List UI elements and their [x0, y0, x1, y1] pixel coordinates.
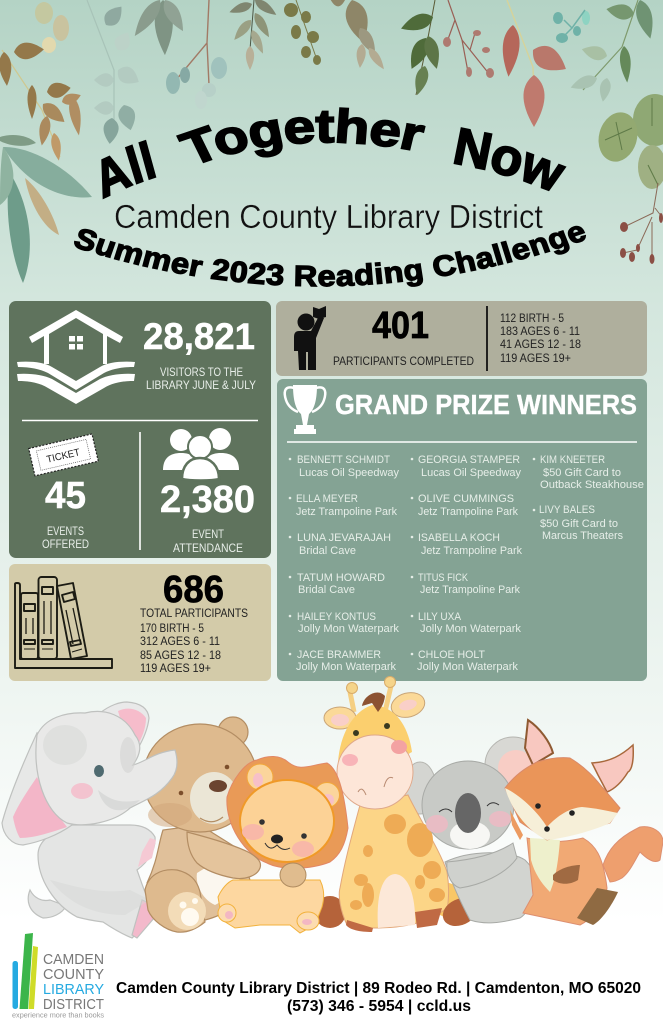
- title: All: [101, 140, 156, 200]
- animal: koala: [422, 737, 541, 923]
- winners column 2: Jolly Mon Waterpark: [420, 623, 521, 635]
- illustration: animals: [2, 676, 663, 938]
- winners column 3: [533, 454, 644, 542]
- foliage: bottom-right twigs: [620, 183, 663, 264]
- footer: address: Camden County Library District | 89 Rodeo Rd. | Camdenton, MO 65020: [116, 980, 641, 997]
- winners column 2: OLIVE CUMMINGS: [418, 493, 514, 505]
- age breakdown: completed: 41 AGES 12 - 18: [500, 339, 581, 351]
- winners column 2: LILY UXA: [418, 611, 461, 623]
- foliage: bottom-left big leaves: [0, 135, 92, 283]
- title: Together: [176, 107, 426, 164]
- winners column 2: Lucas Oil Speedway: [421, 467, 521, 479]
- stat: 401: 401: [372, 305, 429, 347]
- foliage: top big leaf: [129, 0, 189, 55]
- winners column 1: Jolly Mon Waterpark: [298, 623, 399, 635]
- logo: Camden County Library District: CAMDEN: [43, 951, 104, 968]
- foliage: right round leaves: [593, 94, 663, 189]
- animal: giraffe: [314, 676, 482, 932]
- stat: event attendance: ATTENDANCE: [173, 543, 243, 555]
- winners column 1: Bridal Cave: [299, 545, 356, 557]
- winners column 1: Jetz Trampoline Park: [296, 506, 397, 518]
- foliage: top-left pale leaves: [35, 2, 69, 53]
- age breakdown: total: 312 AGES 6 - 11: [140, 636, 220, 648]
- animal: bear arm: [187, 832, 261, 879]
- stat: events offered: [42, 475, 89, 551]
- animal: elephant head: [2, 702, 177, 845]
- label: participants completed: PARTICIPANTS COMPLETED: [333, 356, 474, 368]
- icon: ticket: TICKET: [46, 447, 81, 466]
- stat: 686: 686: [163, 569, 224, 611]
- winners column 1: Lucas Oil Speedway: [299, 467, 399, 479]
- logo bars: [12, 933, 38, 1009]
- age breakdown: completed: 119 AGES 19+: [500, 353, 571, 365]
- heading: grand prize winners: GRAND PRIZE WINNERS: [335, 389, 637, 420]
- winners column 1: Jolly Mon Waterpark: [296, 661, 396, 673]
- winners column 1: Bridal Cave: [298, 584, 355, 596]
- icon: books on shelf: [15, 577, 112, 668]
- winners column 3: KIM KNEETER: [540, 454, 605, 466]
- footer: contact: (573) 346 - 5954 | ccld.us: [287, 998, 471, 1015]
- winners column 1: JACE BRAMMER: [297, 649, 381, 661]
- winners column 2: GEORGIA STAMPER: [418, 454, 520, 466]
- winners column 3: LIVY BALES: [539, 504, 595, 516]
- age breakdown: total: 119 AGES 19+: [140, 663, 211, 675]
- age breakdown: total: 85 AGES 12 - 18: [140, 650, 221, 662]
- age breakdown: completed: [500, 313, 581, 365]
- panel: participants completed: [276, 301, 647, 376]
- stat: events offered: 45: [45, 475, 86, 517]
- winners column 1: TATUM HOWARD: [297, 572, 385, 584]
- foliage: red leaves: [500, 0, 572, 127]
- title: [101, 107, 566, 200]
- icon: people: [163, 428, 239, 480]
- title: Now: [454, 127, 566, 192]
- stat: event attendance: EVENT: [192, 529, 224, 541]
- stat: visitors: 28,821: [143, 316, 255, 357]
- animal: lion: [218, 756, 348, 933]
- panel: library stats: [9, 301, 271, 558]
- foliage: dark green sprig: [398, 0, 443, 97]
- subheading: Summer 2023 Reading Challenge: Summer 2023 Reading Challenge: [74, 226, 586, 287]
- winners column 3: Marcus Theaters: [542, 530, 623, 542]
- foliage: teal sprig: [553, 10, 590, 43]
- animal: elephant body: [28, 825, 156, 938]
- stat: event attendance: 2,380: [160, 479, 255, 521]
- stat: events offered: EVENTS: [47, 526, 84, 538]
- winners column 2: TITUS FICK: [418, 572, 468, 584]
- winners column 1: HAILEY KONTUS: [297, 611, 376, 623]
- foliage: top-right sprig: [569, 0, 658, 103]
- foliage: red berries: [443, 0, 494, 78]
- subtitle: Camden County Library District: [114, 198, 543, 235]
- logo: Camden County Library District: DISTRICT: [43, 996, 104, 1013]
- winners column 3: Outback Steakhouse: [540, 479, 644, 491]
- stat: events offered: OFFERED: [42, 539, 89, 551]
- label: total participants: TOTAL PARTICIPANTS: [140, 608, 248, 620]
- age breakdown: completed: 112 BIRTH - 5: [500, 313, 564, 325]
- logo: Camden County Library District: COUNTY: [43, 966, 104, 983]
- icon: person holding book: [294, 306, 326, 370]
- winners column 1: LUNA JEVARAJAH: [297, 532, 391, 544]
- age breakdown: total: 170 BIRTH - 5: [140, 623, 204, 635]
- foliage: olive sprig: [228, 0, 279, 70]
- winners column 1: ELLA MEYER: [296, 493, 358, 505]
- icon: trophy: [285, 385, 325, 434]
- winners column 2: Jetz Trampoline Park: [421, 545, 522, 557]
- age breakdown: completed: 183 AGES 6 - 11: [500, 326, 580, 338]
- winners column 2: Jetz Trampoline Park: [420, 584, 520, 596]
- logo: Camden County Library District: experience more than books: [12, 1010, 104, 1020]
- winners column 2: Jetz Trampoline Park: [418, 506, 518, 518]
- stat: visitors: VISITORS TO THE: [160, 367, 243, 379]
- winners column 1: BENNETT SCHMIDT: [297, 454, 390, 466]
- panel: total participants: [9, 564, 271, 681]
- winners column 2: Jolly Mon Waterpark: [417, 661, 518, 673]
- animal: fox: [505, 720, 663, 925]
- foliage: brown leaves: [328, 0, 387, 72]
- winners column 2: CHLOE HOLT: [418, 649, 485, 661]
- age breakdown: total: [140, 623, 221, 675]
- stat: visitors: LIBRARY JUNE & JULY: [146, 380, 256, 392]
- winners column 3: $50 Gift Card to: [543, 467, 621, 479]
- logo: Camden County Library District: [12, 933, 104, 1020]
- panel: grand prize winners: [277, 379, 647, 681]
- foliage: brown branch: [0, 41, 84, 161]
- animal: koala left ear: [404, 762, 436, 814]
- foliage: olive berries: [284, 0, 321, 65]
- icon: house and book: [17, 310, 135, 404]
- animal: bear: [143, 717, 257, 932]
- foliage: grey-blue sprig: [87, 0, 143, 145]
- winners column 2: ISABELLA KOCH: [418, 532, 500, 544]
- logo: Camden County Library District: LIBRARY: [43, 981, 104, 998]
- stat: event attendance: [160, 479, 255, 555]
- icon: ticket: [29, 434, 98, 476]
- winners column 2: [411, 454, 522, 673]
- winners column 3: $50 Gift Card to: [540, 518, 618, 530]
- foliage: red stem with round teal leaves: [166, 0, 227, 109]
- winners column 1: [289, 454, 399, 673]
- stat: visitors: [143, 316, 256, 392]
